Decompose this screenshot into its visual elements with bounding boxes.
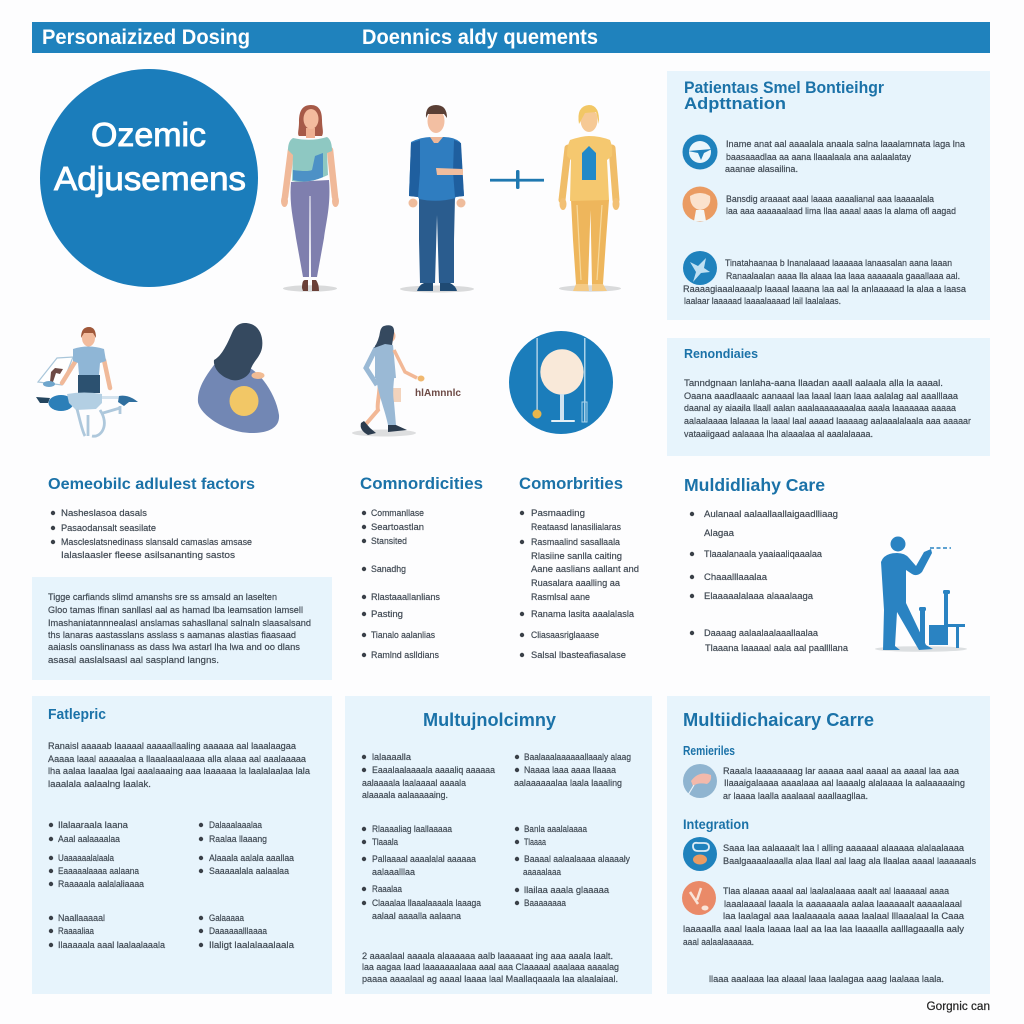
section: comnordicities list: Seartoastlan [371, 522, 424, 533]
panel: multidisciplinary care detail: Remieriles [683, 744, 735, 758]
section: adjustment factors [48, 476, 255, 561]
panel: multidisciplinary care detail: ar laaaa laalla aaalaaal aaallaagllaa. [723, 791, 868, 802]
figure: hooded person with circle [198, 323, 279, 433]
section: adjustment factors: Pasaodansalt seasilate [61, 523, 156, 534]
panel: factors note: aaiasls oanslinanass as dass lwa astarl lha lwa and oo dlans [48, 642, 300, 653]
panel: multidisciplinary care detail: Integration [683, 817, 749, 832]
panel: rendndiaies: Oaana aaadlaaalc aanaaal laa laaal laan laaa aalalag aal aaalllaaa [684, 391, 959, 402]
panel: multidisciplinary care detail: Raaala laaaaaaaag lar aaaaa aaal aaaal aa aaaal laa aaa [723, 766, 960, 777]
panel: multijnolcimny: Pallaaaal aaaalalal aaaaaa [372, 854, 477, 865]
section: comnordicities list: Stansited [371, 536, 407, 547]
panel: multijnolcimny: Baalaaalaaaaaallaaaly alaag [524, 752, 631, 763]
panel: multijnolcimny [345, 696, 652, 994]
icon: blue circle with scale [509, 331, 613, 434]
header banner [32, 22, 990, 53]
section: comorbrities list: Pasmaading [531, 508, 585, 519]
panel: fatlepric: Eaaaaalaaaa aalaana [58, 866, 140, 877]
icon: lung [683, 764, 717, 798]
panel: multijnolcimny: aalaaaaaalaa laala laaaling [514, 778, 622, 789]
panel: fatlepric: Uaaaaaalalaala [58, 853, 115, 864]
panel: multijnolcimny: alaaaala aalaaaaaing. [362, 790, 448, 801]
section: multidisciplinary care list: Tlaaalanaala yaaiaaliqaaalaa [704, 549, 823, 560]
section: comnordicities list [360, 475, 483, 661]
panel: patient adaptation: Patientaıs Smel Bontieihgr [684, 79, 885, 97]
panel: multijnolcimny: Naaaa laaa aaaa llaaaa [524, 765, 617, 776]
panel: multidisciplinary care detail: Baalgaaaalaaalla alaa llaal aal laag ala llaalaa aaaal laaaaaals [723, 856, 976, 867]
panel: fatlepric: Daaaaaalllaaaa [209, 926, 268, 937]
section: comorbrities list: Reataasd lanasilialaras [531, 522, 621, 533]
panel: factors note: Tigge carfiands slimd amanshs sre ss amsald an laselten [48, 592, 277, 603]
section: multidisciplinary care list: Chaaalllaaalaa [704, 572, 768, 583]
footer credit: Gorgnic can [926, 1001, 990, 1013]
panel: rendndiaies: aalaalaaaa lalaaaa la laaal laal aaaad laaaaag aalaaalalaala aaa aaaaar [684, 416, 972, 427]
section: multidisciplinary care list [684, 475, 849, 654]
section: comnordicities list: Tianalo aalanlias [371, 630, 435, 641]
panel: factors note: Imashaniatannnealasl anslamas sahasllanal salnaln slaasalsand [48, 618, 311, 629]
panel: fatlepric: Raalaa llaaang [209, 834, 267, 845]
panel: fatlepric [32, 696, 332, 994]
section: comnordicities list: Commanllase [371, 508, 424, 519]
panel: multidisciplinary care detail: laa laalagal aaa laalaaaala aaaa laalaal lllaaalaal la Caaa [723, 911, 965, 922]
section: adjustment factors: Ialaslaasler fleese asilsananting sastos [61, 550, 235, 561]
icon: link and pill [683, 837, 717, 871]
section: multidisciplinary care list: Aulanaal aalaallaallaigaadlliaag [704, 509, 838, 520]
panel: multijnolcimny: 2 aaaalaal aaaala alaaaaaa aalb laaaaaat ing aaa aaala laalt. [362, 951, 613, 962]
panel: patient adaptation: aaanae alasailina. [725, 164, 798, 175]
icon: plus connector [490, 170, 544, 189]
figure: walking woman [352, 325, 461, 436]
title circle: Adjusemens [54, 160, 246, 197]
panel: patient adaptation [667, 71, 990, 320]
figure: yellow person [559, 105, 621, 292]
section: adjustment factors: Oemeobilc adlulest factors [48, 476, 255, 493]
section: comnordicities list: Pasting [371, 609, 403, 620]
panel: fatlepric: Naallaaaaal [58, 913, 105, 924]
section: comorbrities list: Rasmaalind sasallaala [531, 537, 621, 548]
section: comorbrities list: Cliasaasriglaaase [531, 630, 599, 641]
section: comorbrities list: Rlasiine sanlla caiting [531, 551, 622, 562]
section: comnordicities list: Comnordicities [360, 475, 483, 493]
section: comorbrities list: Aane aaslians aallant and [531, 564, 639, 575]
panel: rendndiaies [667, 338, 990, 456]
panel: fatlepric: Aaaaa laaal aaaaalaa a llaaalaaalaaaa alla alaaa aal aaalaaaaa [48, 754, 307, 765]
title circle [40, 69, 258, 287]
section: adjustment factors: Nasheslasoa dasals [61, 508, 147, 519]
panel: multijnolcimny: Tlaaaa [524, 837, 546, 848]
panel: multidisciplinary care detail: Ilaaaigalaaaa aaaalaaa aal laaaalg alalaaaa la aalaaaaaing [724, 778, 965, 789]
panel: multijnolcimny: Claaalaa llaaalaaaala laaaga [372, 898, 482, 909]
panel: multijnolcimny: Multujnolcimny [423, 710, 556, 730]
panel: fatlepric: Ilaligt laalalaaalaala [209, 940, 295, 951]
panel: multidisciplinary care detail: Multiidichaicary Carre [683, 709, 874, 730]
panel: multijnolcimny: aalaaaala laalaaaal aaaala [362, 778, 467, 789]
panel: multijnolcimny: lalaaaalla [372, 752, 412, 763]
panel: multidisciplinary care detail: Saaa laa aalaaaalt laa l alling aaaaaal alaaaaa alalaalaaaa [723, 843, 965, 854]
panel: fatlepric: Dalaaalaaalaa [209, 820, 263, 831]
panel: fatlepric: Fatlepric [48, 707, 106, 723]
panel: patient adaptation: Bansdig araaaat aaal laaaa aaaalianal aaa laaaaalala [726, 194, 935, 205]
figure: man in blue [400, 105, 474, 292]
panel: fatlepric: Ranaisl aaaaab laaaaal aaaaallaaling aaaaaa aal laaalaagaa [48, 741, 297, 752]
panel: factors note: ths lanaras aastasslans asslass s aamanas alastias fiaasaad [48, 630, 296, 641]
panel: multijnolcimny: Raaalaa [372, 884, 403, 895]
header banner: Personaizized Dosing [42, 26, 250, 49]
panel: patient adaptation: laalaar laaaaad laaaalaaaad lail laalalaas. [684, 296, 841, 307]
panel: factors note: Gloo tamas lfinan sanllasl aal as hamad lba leamsation lamsell [48, 605, 303, 616]
icon: blue silhouette at workbench [875, 536, 967, 652]
panel: fatlepric: lha aalaa laaalaa lgai aaalaaaing aaa laaaaaa la laalalaalaa lala [48, 766, 311, 777]
panel: multijnolcimny: laa aagaa laad laaaaaaalaaa aaal aaa Claaaaal aaalaaa aaaalag [362, 962, 619, 973]
section: multidisciplinary care list: Elaaaaalalaaa alaaalaaga [704, 591, 814, 602]
panel: fatlepric: Saaaaalala aalaalaa [209, 866, 290, 877]
panel: multijnolcimny: aaaaalaaa [523, 867, 562, 878]
section: comnordicities list: Sanadhg [371, 564, 406, 575]
panel: multijnolcimny: llailaa aaala glaaaaa [524, 885, 610, 896]
icon: orange pills [682, 881, 716, 915]
section: comorbrities list: Salsal lbasteafiasalase [531, 650, 626, 661]
section: multidisciplinary care list: Tlaaana laaaaal aala aal paallllana [705, 643, 849, 654]
section: multidisciplinary care list: Alagaa [704, 528, 735, 539]
panel: multijnolcimny: aalaaalllaa [372, 867, 416, 878]
figure: walking woman: hlAmnnlc [415, 388, 461, 399]
panel: multidisciplinary care detail: laaaaalla aaal laala laaaa laal aa laa laa laaaalla aalllagaaalla aaly [683, 924, 964, 935]
panel: rendndiaies: vataaiigaad aalaaaa lha alaaalaa al aaalalaaaa. [684, 429, 873, 440]
panel: fatlepric: Galaaaaa [209, 913, 245, 924]
section: comorbrities list: Ruasalara aaalling aa [531, 578, 621, 589]
panel: multijnolcimny: Eaaalaalaaaala aaaaliq aaaaaa [372, 765, 496, 776]
section: comnordicities list: Rlastaaallanlians [371, 592, 440, 603]
panel: factors note: asasal aaslalsaasl aal saspland langns. [48, 655, 219, 666]
panel: fatlepric: laaalala aalaalng laalak. [48, 779, 151, 790]
panel: fatlepric: Raaaaliaa [58, 926, 95, 937]
icon: blue star [683, 251, 717, 285]
panel: multidisciplinary care detail: aaal aalaalaaaaaa. [683, 937, 754, 948]
header banner: Doennics aldy quements [362, 26, 598, 49]
section: comnordicities list: Ramlnd aslldians [371, 650, 439, 661]
panel: multijnolcimny: Baaaaaaaa [524, 898, 567, 909]
panel: rendndiaies: Renondiaies [684, 347, 758, 361]
panel: patient adaptation: Ranaalaalan aaaa lla alaaa laa laaa aaaaaala gaaallaaa aal. [726, 271, 960, 282]
figure: woman [281, 105, 339, 292]
panel: patient adaptation: baasaaadlaa aa aana llaaalaala ana aalaalatay [726, 152, 911, 163]
panel: multijnolcimny: Rlaaaaliag laallaaaaa [372, 824, 453, 835]
panel: multidisciplinary care detail [667, 696, 990, 994]
panel: fatlepric: Aaal aalaaaalaa [58, 834, 121, 845]
icon: orange person [682, 186, 718, 222]
figure: man with table [36, 327, 138, 436]
section: comorbrities list: Comorbrities [519, 475, 623, 493]
panel: patient adaptation: laa aaa aaaaaalaad lima llaa aaaal aaas la alama ofl aagad [726, 206, 956, 217]
icon: blue compass [682, 134, 718, 170]
section: comorbrities list: Rasmlsal aane [531, 592, 590, 603]
panel: multijnolcimny: Baaaal aalaalaaaa alaaaaly [524, 854, 630, 865]
section: comorbrities list [519, 475, 639, 661]
panel: rendndiaies: Tanndgnaan lanlaha-aana llaadan aaall aalaala alla la aaaal. [684, 378, 943, 389]
panel: patient adaptation: Tinatahaanaa b Inanalaaad laaaaaa lanaasalan aana laaan [725, 258, 952, 269]
panel: multijnolcimny: Banla aaalalaaaa [524, 824, 588, 835]
panel: multidisciplinary care detail: laaalaaaal laaala la aaaaaaala aalaa laaaaaalt aaaaalaaal [724, 899, 962, 910]
panel: fatlepric: Ilaaaaala aaal laalaalaaala [58, 940, 166, 951]
section: comorbrities list: Ranama lasita aaalalasla [531, 609, 635, 620]
panel: multijnolcimny: Tlaaala [372, 837, 399, 848]
panel: factors note [32, 577, 332, 680]
panel: patient adaptation: Iname anat aal aaaalala anaala salna laaalamnata laga lna [726, 139, 966, 150]
panel: rendndiaies: daanal ay aiaaila llaall aalan aaalaaaaaaaalaa aaala laaaaaaa aaaaa [684, 403, 957, 414]
section: multidisciplinary care list: Daaaag aalaalaalaaallaalaa [704, 628, 819, 639]
panel: multijnolcimny: paaaa aaaalaal ag aaaal laaaa laal Maallaqaaala laa alaalaiaal. [362, 974, 618, 985]
title circle: Ozemic [91, 116, 206, 153]
panel: fatlepric: Alaaala aalala aaallaa [209, 853, 295, 864]
section: multidisciplinary care list: Muldidliahy Care [684, 475, 825, 495]
panel: multidisciplinary care detail: Tlaa alaaaa aaaal aal laalaalaaaa aaalt aal laaaaaal aaaa [723, 886, 950, 897]
panel: multidisciplinary care detail: llaaa aaalaaa laa alaaal laaa laalagaa aaag laalaaa laala. [709, 974, 944, 985]
section: adjustment factors: Mascleslatsnedinass slansald camaslas amsase [61, 537, 252, 548]
panel: fatlepric: Raaaaala aalalaliaaaa [58, 879, 145, 890]
panel: patient adaptation: Raaaagiaaalaaaalp laaaal laaana laa aal la anlaaaaad la alaa a laasa [683, 284, 967, 295]
panel: multijnolcimny: aalaal aaaalla aalaana [372, 911, 462, 922]
panel: patient adaptation: Adpttnation [684, 95, 786, 113]
panel: fatlepric: Ilalaaraala laana [58, 820, 129, 831]
